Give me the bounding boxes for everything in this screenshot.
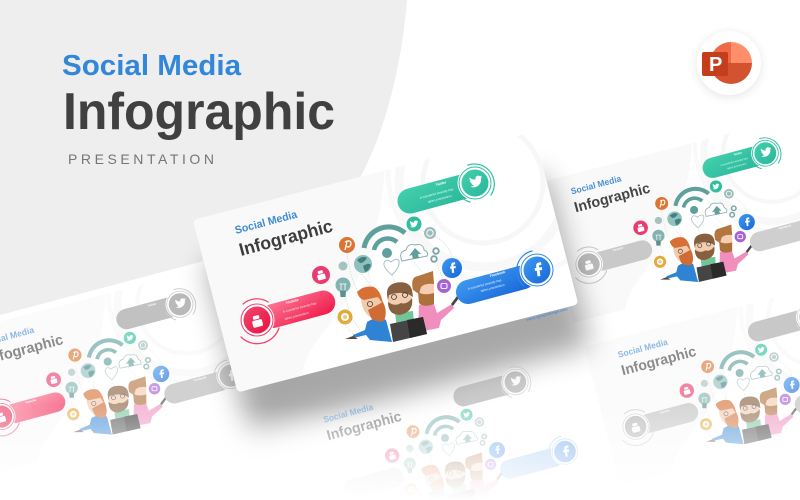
right slide bars [575, 138, 800, 283]
bottom right slide bars: Youtube [659, 408, 671, 415]
panel: bottom right slide preview [578, 217, 800, 491]
bottom right slide heading: Infographic [620, 344, 698, 379]
main slide heading: Social Media [234, 209, 299, 237]
callout: facebook: Facebook [489, 270, 506, 278]
left slide bars [0, 289, 245, 436]
callout: youtube: taken possession [284, 311, 309, 321]
bottom right slide bars [622, 302, 800, 446]
main slide illustration [312, 216, 462, 342]
callout: youtube [240, 288, 338, 344]
right slide bars: Youtube [612, 245, 624, 252]
callout: twitter: taken possession [427, 194, 452, 204]
bottom right slide illustration [680, 344, 800, 444]
main slide shadow [205, 174, 590, 434]
bottom centre slide illustration [385, 409, 505, 500]
bottom centre slide heading: Social Media [322, 402, 374, 425]
right slide illustration [633, 180, 755, 282]
left slide illustration [46, 332, 169, 435]
main slide heading: Infographic [237, 216, 335, 260]
background blob [0, 0, 407, 315]
icon: PowerPoint badge [697, 31, 761, 97]
left slide bars: Twitter [147, 301, 158, 308]
panel: bottom centre slide preview [322, 367, 579, 500]
callout: facebook: taken possession [480, 283, 505, 293]
bottom right slide heading: Social Media [617, 337, 669, 360]
left slide bars: Facebook [193, 375, 207, 382]
callout: twitter [395, 164, 494, 216]
callout: youtube: A wonderful serenity has [282, 301, 317, 314]
bottom centre slide heading: Infographic [325, 409, 403, 444]
right slide bars: taken possession [727, 161, 747, 170]
subtitle: PRESENTATION [68, 151, 214, 167]
callout: twitter: Twitter [435, 180, 447, 187]
right slide bars: Facebook [778, 223, 792, 230]
panel: main slide [185, 58, 612, 400]
title: Infographic: Infographic [63, 83, 335, 141]
callout: facebook [453, 251, 554, 307]
callout: youtube: Youtube [285, 298, 299, 305]
panel: right slide preview [530, 52, 800, 329]
callout: twitter: A wonderful serenity has [419, 187, 454, 200]
right slide heading: Infographic [573, 181, 652, 216]
panel: left slide preview [0, 202, 292, 482]
right slide heading: Social Media [570, 173, 623, 196]
website url: www.rigraphdesign.com [525, 307, 569, 322]
left slide bars: Youtube [25, 398, 37, 404]
callout: facebook: A wonderful serenity has [467, 278, 502, 291]
bottom fade overlay [0, 405, 800, 500]
title: Social Media: Social Media [62, 50, 242, 82]
right slide bars: Twitter [733, 150, 743, 157]
icon: PowerPoint badge: P [709, 54, 722, 76]
bottom centre slide bars [342, 367, 579, 500]
right slide bars: A wonderful serenity has [720, 156, 749, 167]
